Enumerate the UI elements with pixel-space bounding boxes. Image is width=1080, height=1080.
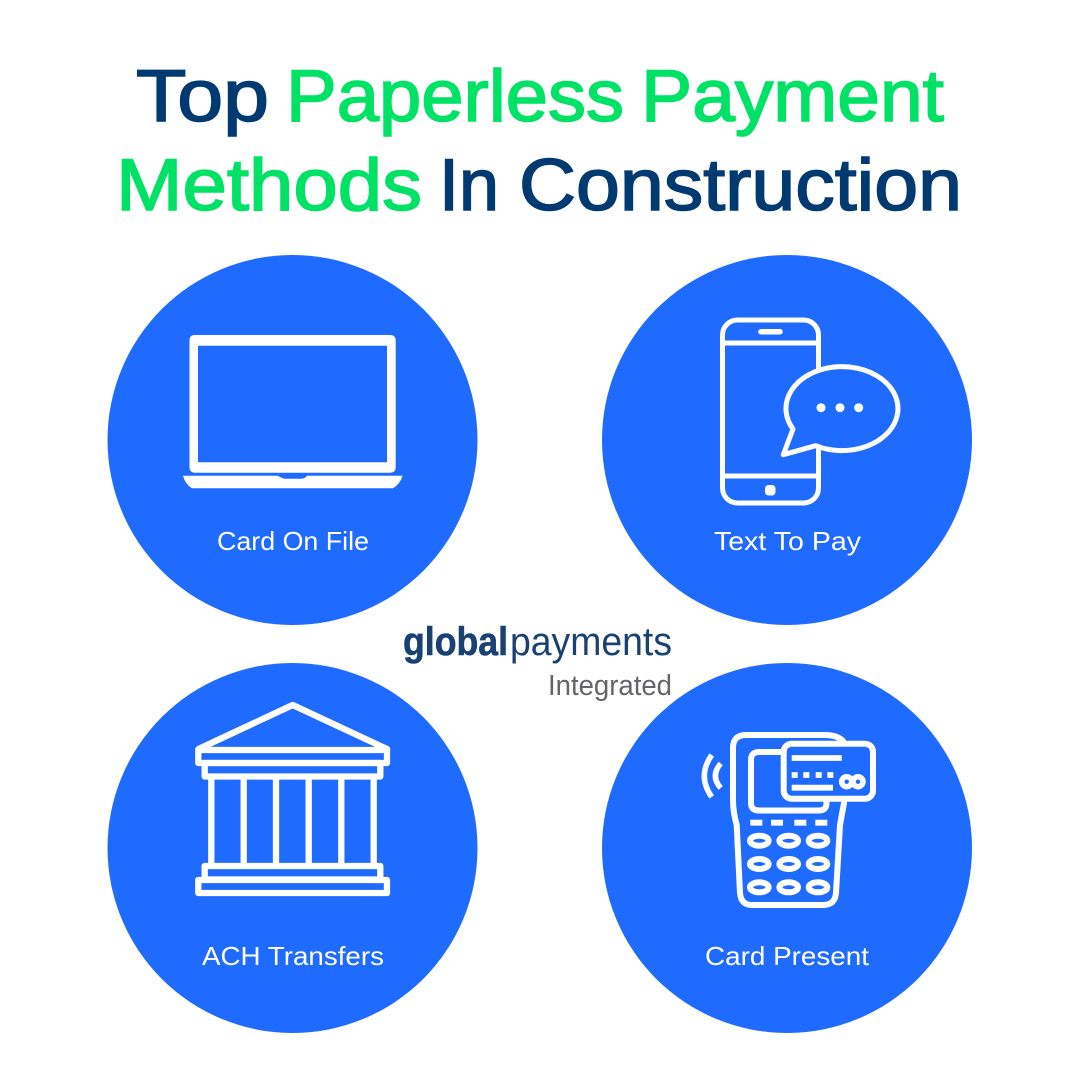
logo: global payments integrated: payments (510, 620, 672, 664)
title: Paperless (286, 56, 624, 137)
label: ACH transfers: ACH Transfers (202, 941, 384, 971)
panel: ACH transfers (108, 663, 478, 1033)
panel: card present (602, 663, 972, 1033)
title (116, 56, 962, 226)
panel: card on file (108, 255, 478, 625)
label: text to pay: Text To Pay (714, 526, 861, 556)
title: Methods (116, 145, 422, 226)
label: card on file: Card On File (217, 526, 369, 556)
label: card present: Card Present (705, 941, 870, 971)
title: Top (136, 56, 269, 137)
logo: global payments integrated: global (403, 620, 508, 664)
icon: laptop (183, 335, 403, 488)
title: In (439, 145, 499, 226)
logo: global payments integrated: Integrated (548, 670, 672, 702)
panel: text to pay (602, 255, 972, 625)
title: Payment (641, 56, 944, 137)
icon: bank building (198, 705, 387, 893)
icon: phone with chat bubble (722, 320, 898, 503)
logo: global payments integrated (403, 620, 672, 702)
icon: card terminal (704, 735, 873, 905)
title: Construction (519, 145, 962, 226)
